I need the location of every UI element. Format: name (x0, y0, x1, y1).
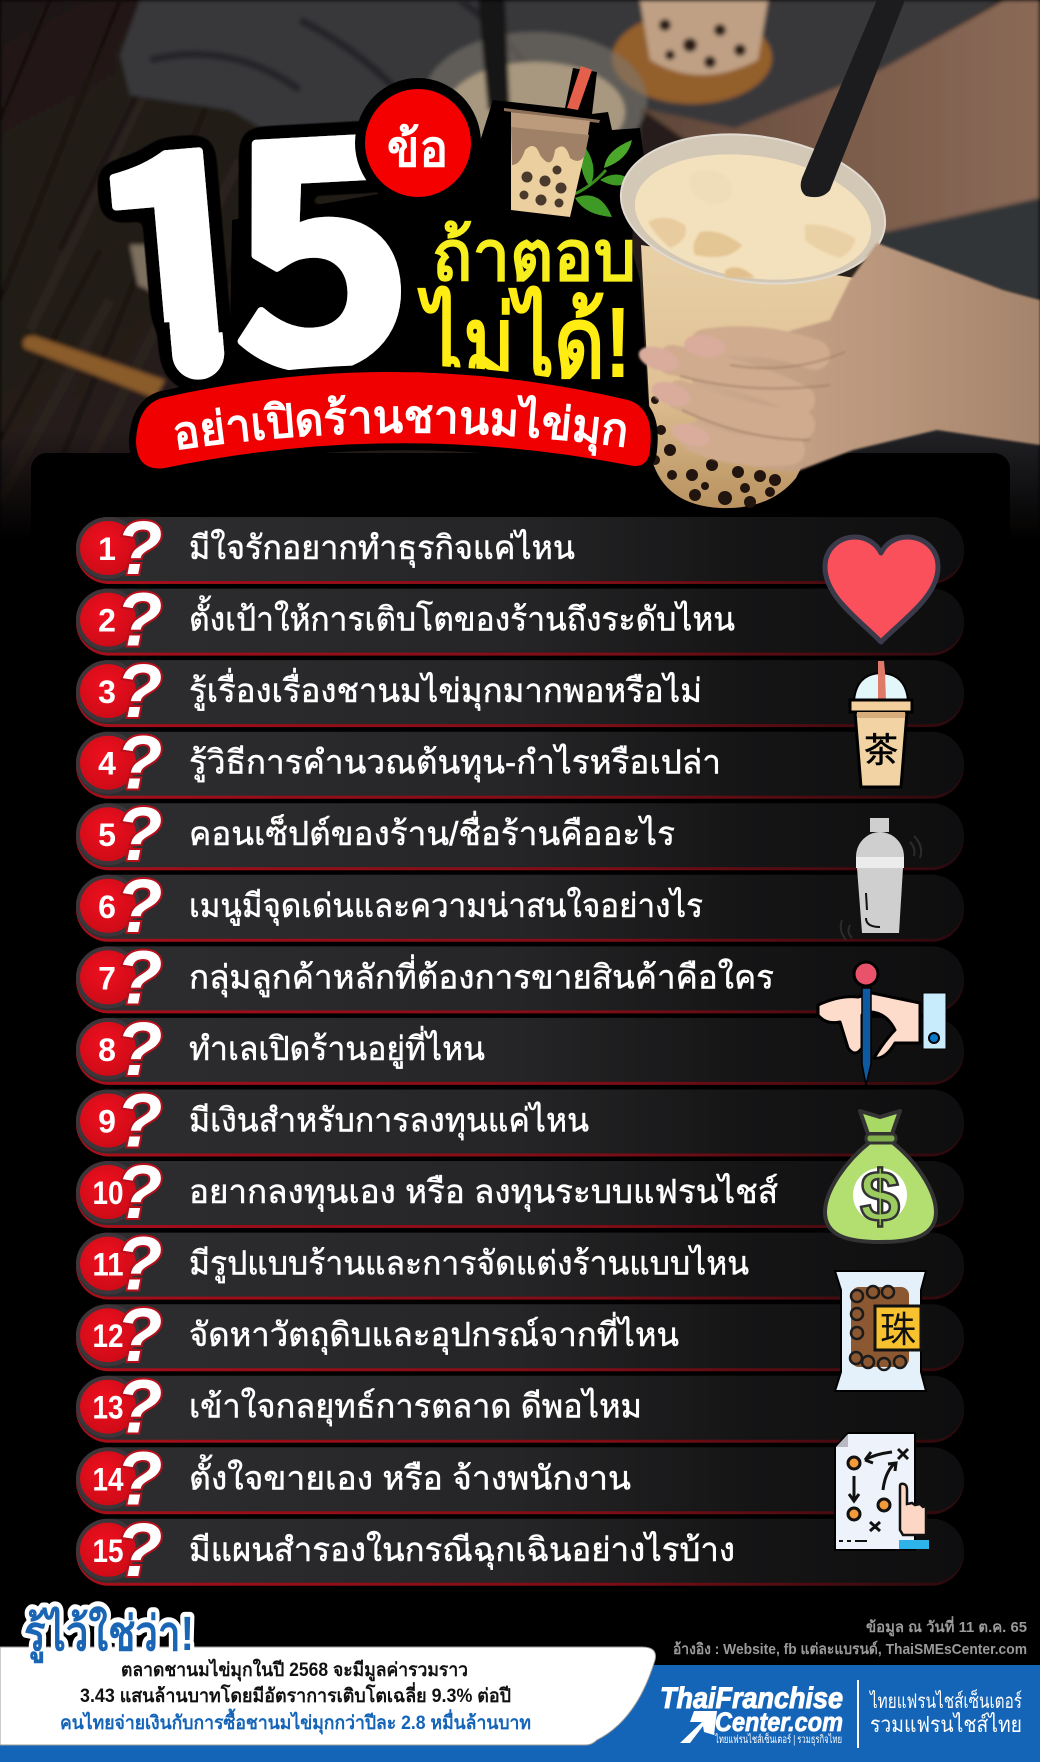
row 1: 1 (98, 531, 116, 567)
row 5: คอนเซ็ปต์ของร้าน/ชื่อร้านคืออะไร (189, 811, 675, 852)
row 10: ? (116, 1150, 162, 1235)
tie (866, 1134, 896, 1143)
hand (818, 993, 920, 1058)
heading: รู้ไว้ใช่ว่า!: รู้ไว้ใช่ว่า! (24, 1605, 194, 1664)
row 9: ? (116, 1078, 162, 1164)
wordmark line 2: Center.com (715, 1707, 843, 1737)
wooden table (0, 0, 1040, 560)
row 13: 13 (92, 1390, 124, 1426)
row 15: มีแผนสำรองในกรณีฉุกเฉินอย่างไรบ้าง (189, 1531, 735, 1570)
red badge: ข้อ: ข้อ (387, 121, 448, 177)
boba pearls (520, 166, 566, 208)
footer: blue band (0, 1665, 1040, 1762)
pin shaft (862, 988, 871, 1085)
grey cloth (118, 0, 998, 140)
second cup straw (478, 0, 510, 110)
digit 5: 5 (216, 1, 422, 458)
icon: money bag (825, 1111, 936, 1242)
white coin (853, 1168, 907, 1222)
cup rim (850, 700, 912, 712)
top dome (856, 832, 904, 857)
motion arcs (841, 836, 921, 940)
row 7: 7 (98, 960, 116, 996)
cuff (923, 993, 946, 1049)
logo: ThaiFranchise Center.com (660, 1682, 843, 1746)
icon: tea cup with 茶 (850, 661, 912, 787)
panel: did you know (0, 1647, 655, 1745)
brand text (868, 1688, 1022, 1737)
white band (856, 857, 904, 868)
row 7 (76, 935, 964, 1020)
source note (673, 1616, 1027, 1658)
icon: bubble tea cup with leaves (504, 66, 632, 217)
paper (835, 1433, 915, 1550)
row 3 (76, 649, 964, 734)
row 2: ตั้งเป้าให้การเติบโตของร้านถึงระดับไหน (189, 596, 735, 638)
list panel: black rounded background (31, 453, 1010, 1633)
row 14 (76, 1436, 964, 1521)
blue cuff (899, 1540, 929, 1549)
row 3: รู้เรื่องเรื่องชานมไข่มุกมากพอหรือไม่ (189, 668, 702, 711)
glyph 珠: 珠 (880, 1301, 916, 1353)
tea foam drip (511, 127, 589, 165)
tea leaves (572, 140, 632, 217)
row 10: 10 (92, 1175, 124, 1211)
row 8: ทำเลเปิดร้านอยู่ที่ไหน (189, 1026, 485, 1069)
body (857, 868, 903, 933)
row 10: อยากลงทุนเอง หรือ ลงทุนระบบแฟรนไชส์ (189, 1173, 778, 1212)
row 6 (76, 864, 964, 949)
fingers (672, 341, 815, 451)
row 11: มีรูปแบบร้านและการจัดแต่งร้านแบบไหน (189, 1245, 749, 1284)
straw (878, 661, 886, 700)
row 6: เมนูมีจุดเด่นและความน่าสนใจอย่างไร (189, 887, 703, 926)
row 4 (76, 721, 964, 806)
finger creases (680, 352, 845, 440)
dollar sign: $ (860, 1157, 900, 1237)
row 9: มีเงินสำหรับการลงทุนแค่ไหน (189, 1102, 589, 1140)
line 1: ตลาดชานมไข่มุกในปี 2568 จะมีมูลค่ารวมราว (121, 1658, 468, 1682)
glyph 茶: 茶 (864, 723, 898, 772)
straw (567, 66, 592, 110)
row 12: ? (116, 1293, 162, 1378)
dark cloth below hand (854, 431, 1038, 470)
row 13 (76, 1365, 964, 1450)
row 10 (76, 1150, 964, 1235)
red badge: ข้อ (355, 78, 481, 208)
bag body (825, 1142, 936, 1242)
row 6: ? (116, 864, 162, 949)
second cup lid behind title (427, 30, 649, 140)
title number: 15 (97, 120, 401, 387)
row 11: 11 (92, 1247, 124, 1283)
icon: strategy plan with pointing hand (835, 1433, 929, 1550)
cup body (855, 712, 907, 787)
line 3: คนไทยจ่ายเงินกับการซื้อชานมไข่มุกกว่าปีละ 2.8 หมื่นล้านบาท (60, 1708, 531, 1735)
row 2 (76, 578, 964, 663)
wordmark line 1: ThaiFranchise (660, 1682, 843, 1715)
grey cloth lower right (875, 198, 1040, 300)
boba pearls (650, 396, 781, 508)
nails (636, 332, 727, 451)
brown pearls area (851, 1287, 909, 1367)
icon: heart (825, 537, 938, 642)
milk surface (627, 140, 879, 294)
row 8: ? (116, 1007, 162, 1092)
panel text (60, 1658, 531, 1735)
row 1: มีใจรักอยากทำธุรกิจแค่ไหน (189, 529, 575, 568)
wicker coaster (612, 12, 772, 104)
body shade (857, 712, 905, 718)
digit 1: 1 (67, 11, 289, 474)
highlight marks (866, 893, 880, 927)
fade to black (0, 450, 1040, 560)
white bowl (127, 242, 149, 294)
row 3: ? (116, 649, 162, 734)
small drink behind (640, 0, 768, 75)
row 7: กลุ่มลูกค้าหลักที่ต้องการขายสินค้าคือใคร (189, 954, 774, 997)
pin head (854, 962, 878, 986)
icon: hand holding pin (818, 962, 946, 1085)
dome lid (854, 673, 908, 701)
brand line 2: รวมแฟรนไชส์ไทย (870, 1712, 1022, 1737)
row 4: รู้วิธีการคำนวณต้นทุน-กำไรหรือเปล่า (189, 744, 721, 783)
plays: crosses and arrows (849, 1449, 908, 1531)
row 7: ? (116, 935, 162, 1020)
row 8: 8 (98, 1032, 116, 1068)
rim (611, 118, 895, 300)
big straw (801, 0, 905, 197)
divider (857, 1680, 859, 1748)
lid (504, 108, 600, 123)
icon: cocktail shaker (841, 818, 921, 940)
row 12 (76, 1293, 964, 1378)
hand holding cup (636, 243, 1040, 472)
ice cubes (648, 170, 855, 278)
row 14: ? (116, 1436, 162, 1521)
cuff button (929, 1033, 939, 1043)
row 11: ? (116, 1222, 162, 1307)
row 6: 6 (98, 889, 116, 925)
cup body (641, 245, 868, 508)
cap (870, 818, 889, 832)
row 2: 2 (98, 603, 116, 639)
back of hand (690, 243, 1040, 472)
yellow headline (417, 217, 636, 399)
icon: pearls bag with 珠 (835, 1271, 926, 1391)
row 15 (76, 1508, 964, 1593)
line 2: 3.43 แสนล้านบาทโดยมีอัตราการเติบโตเฉลี่ย 9.3% ต่อปี (80, 1682, 511, 1707)
row 9: 9 (98, 1104, 116, 1140)
row 11 (76, 1222, 964, 1307)
row 4: 4 (98, 746, 116, 782)
question list (76, 506, 964, 1593)
line: ถ้าตอบ: ถ้าตอบ (432, 217, 636, 295)
wooden handle (23, 336, 165, 398)
pointing hand (900, 1484, 926, 1535)
row 5: 5 (98, 817, 116, 853)
logo tagline: ไทยแฟรนไชส์เซ็นเตอร์ | รวมธุรกิจไทย (714, 1732, 842, 1746)
logo arrow (680, 1711, 717, 1743)
row 12: จัดหาวัตถุดิบและอุปกรณ์จากที่ไหน (189, 1312, 679, 1355)
row 8 (76, 1007, 964, 1092)
row 14: ตั้งใจขายเอง หรือ จ้างพนักงาน (189, 1454, 631, 1496)
cup body (511, 127, 589, 217)
row 5: ? (116, 792, 162, 877)
data date: ข้อมูล ณ วันที่ 11 ต.ค. 65 (866, 1616, 1027, 1637)
red banner: อย่าเปิดร้านชานมไข่มุก: อย่าเปิดร้านชานมไข่มุก (174, 394, 626, 456)
row 3: 3 (98, 674, 116, 710)
plays: circles (848, 1457, 890, 1520)
row 12: 12 (92, 1318, 124, 1354)
row 1: ? (116, 506, 162, 591)
pearl rings (850, 1286, 906, 1370)
row 14: 14 (92, 1461, 124, 1497)
arm (640, 0, 1040, 232)
row 2: ? (116, 578, 162, 663)
big drink cup (611, 0, 905, 508)
red banner: อย่าเปิดร้านชานมไข่มุก (129, 366, 658, 468)
row 5 (76, 792, 964, 877)
title: black backing shape (190, 68, 650, 430)
row 9 (76, 1078, 964, 1164)
row 1 (76, 506, 964, 591)
cloth folds (150, 1, 481, 92)
line: ไม่ได้!: ไม่ได้! (417, 286, 631, 399)
folded corner (836, 1434, 848, 1447)
bag neck (860, 1111, 900, 1134)
package (835, 1271, 926, 1391)
label (875, 1306, 921, 1350)
background photo: wood table, cloth, arm and small drink (0, 0, 1040, 560)
row 4: ? (116, 721, 162, 806)
row 13: ? (116, 1365, 162, 1450)
row 15: ? (116, 1508, 162, 1593)
row 13: เข้าใจกลยุทธ์การตลาด ดีพอไหม (189, 1388, 642, 1427)
row 15: 15 (92, 1533, 124, 1569)
bottom dashes (839, 1540, 867, 1542)
